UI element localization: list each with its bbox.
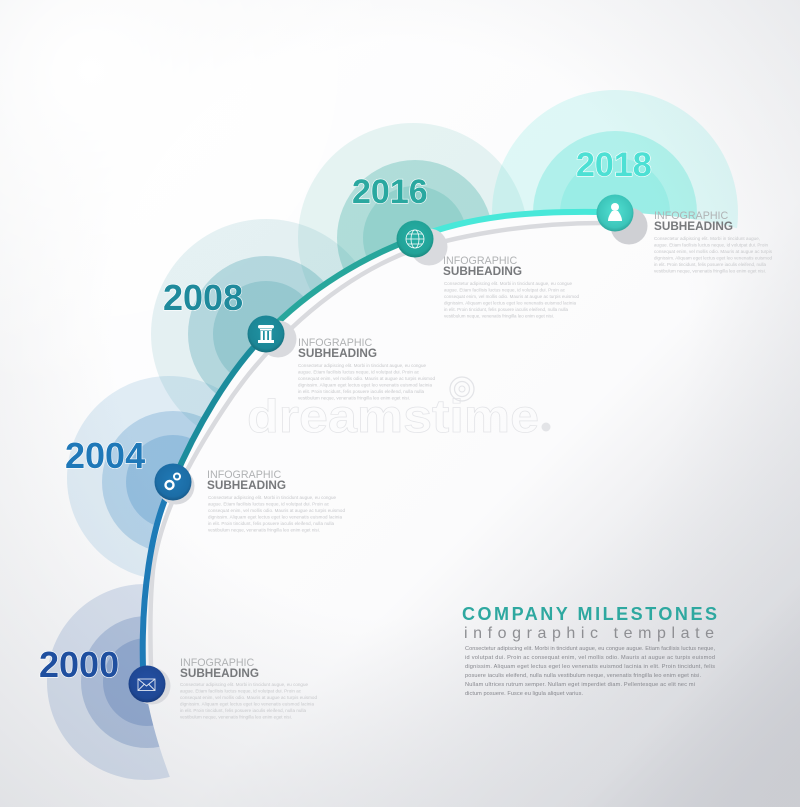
text block 2018: vestibulum neque, venenatis fringilla leo enim eget nisi. <box>654 268 766 274</box>
year 2018: 2018 <box>576 146 652 184</box>
text block 2000: augue. Etiam facilisis luctus neque, id volutpat dui. Proin ac <box>180 688 302 694</box>
text block 2008: vestibulum neque, venenatis fringilla leo enim eget nisi. <box>298 396 410 400</box>
text block 2000: consequat enim, vel mollis odio. Mauris at augue ac turpis euismod <box>180 695 317 700</box>
node 2004 <box>154 464 194 504</box>
segment 2008-2016 <box>266 238 415 334</box>
year 2008: 2008 <box>163 277 243 318</box>
year 2000: 2000 <box>39 644 119 685</box>
text block 2004: Consectetur adipiscing elit. Morbi in tincidunt augue, eu congue <box>208 495 336 500</box>
year labels <box>39 146 652 685</box>
text block 2016: Consectetur adipiscing elit. Morbi in tincidunt augue, eu congue <box>444 281 572 286</box>
text block 2004: in elit. Proin tincidunt, felis posuere iaculis eleifend, nulla nulla <box>208 521 334 526</box>
description: Nullam ultrices rutrum semper. Nullam eget imperdiet diam. Pellentesque ac elit nec mi <box>465 682 695 688</box>
node 2016 <box>396 220 448 266</box>
title: COMPANY MILESTONES <box>462 604 717 624</box>
node 2008 <box>248 316 296 358</box>
text block 2018 <box>654 210 773 274</box>
segment 2000-2004 <box>143 482 173 668</box>
text block 2004: INFOGRAPHIC <box>207 469 282 481</box>
text block 2000: vestibulum neque, venenatis fringilla leo enim eget nisi. <box>180 714 292 720</box>
description <box>465 646 715 697</box>
text block 2000: Consectetur adipiscing elit. Morbi in tincidunt augue, eu congue <box>180 682 308 687</box>
grey shadow curve <box>150 223 610 668</box>
subtitle: infographic template <box>464 625 714 642</box>
text block 2000: INFOGRAPHIC <box>180 657 255 669</box>
icon: column <box>258 325 274 343</box>
text block 2016: consequat enim, vel mollis odio. Mauris at augue ac turpis euismod <box>444 294 579 299</box>
watermark <box>247 377 550 442</box>
text block 2004: vestibulum neque, venenatis fringilla leo enim eget nisi. <box>208 528 320 532</box>
text block 2016: in elit. Proin tincidunt, felis posuere iaculis eleifend, nulla nulla <box>444 307 568 312</box>
icon: person <box>608 203 622 221</box>
watermark: dreamstime <box>247 390 539 442</box>
text block 2000 <box>180 657 317 720</box>
text block 2016: vestibulum neque, venenatis fringilla leo enim eget nisi. <box>444 314 554 318</box>
description: Consectetur adipiscing elit. Morbi in tincidunt augue, eu congue augue. Etiam facilisis luctus neque, <box>465 646 715 652</box>
segment 2016-2018 <box>415 212 600 238</box>
text block 2004: SUBHEADING <box>207 479 286 492</box>
text block 2016: SUBHEADING <box>443 265 522 278</box>
text block 2016: dignissim. Aliquam eget lectus eget leo venenatis euismod lacinia <box>444 300 576 306</box>
description: id volutpat dui. Proin ac consequat enim, vel mollis odio. Mauris at augue ac turpis euismod <box>465 655 715 661</box>
text block 2000: SUBHEADING <box>180 667 259 680</box>
text block 2016 <box>443 255 579 318</box>
text block 2004 <box>207 469 345 532</box>
text block 2018: INFOGRAPHIC <box>654 210 729 222</box>
text block 2004: consequat enim, vel mollis odio. Mauris at augue ac turpis euismod <box>208 508 345 513</box>
text block 2008: consequat enim, vel mollis odio. Mauris at augue ac turpis euismod <box>298 376 435 381</box>
text block 2016: augue. Etiam facilisis luctus neque, id volutpat dui. Proin ac <box>444 288 566 292</box>
text block 2018: SUBHEADING <box>654 220 733 233</box>
description: dictum posuere. Fusce eu ligula aliquet varius. <box>465 691 583 697</box>
text block 2008 <box>298 337 435 400</box>
circles: 2018 <box>492 90 738 228</box>
text block 2008: Consectetur adipiscing elit. Morbi in tincidunt augue, eu congue <box>298 363 426 368</box>
year 2004: 2004 <box>65 435 145 476</box>
icon: envelope <box>138 679 155 690</box>
text block 2008: INFOGRAPHIC <box>298 337 373 349</box>
text block 2000: dignissim. Aliquam eget lectus eget leo venenatis euismod lacinia <box>180 702 314 706</box>
text block 2008: SUBHEADING <box>298 347 377 360</box>
timeline curve <box>143 212 600 668</box>
icon: gears <box>166 474 180 489</box>
text block 2008: in elit. Proin tincidunt, felis posuere iaculis eleifend, nulla nulla <box>298 389 424 394</box>
node 2000 <box>128 666 170 704</box>
text block 2018: dignissim. Aliquam eget lectus eget leo venenatis euismod <box>654 256 772 260</box>
circles: 2000 <box>47 584 170 780</box>
text block 2008: dignissim. Aliquam eget lectus eget leo venenatis euismod lacinia <box>298 382 432 388</box>
circles: 2016 <box>298 123 524 290</box>
icon: globe <box>406 230 424 248</box>
text block 2018: Consectetur adipiscing elit. Morbi in tincidunt augue, <box>654 236 760 241</box>
text block 2004: augue. Etiam facilisis luctus neque, id volutpat dui. Proin ac <box>208 502 330 506</box>
text block 2000: in elit. Proin tincidunt, felis posuere iaculis eleifend, nulla nulla <box>180 708 306 713</box>
description: posuere iaculis eleifend, nulla nulla vestibulum neque, venenatis fringilla leo enim eget nisi. <box>465 673 701 679</box>
segment 2004-2008 <box>173 334 266 482</box>
text block 2016: INFOGRAPHIC <box>443 255 518 267</box>
text block 2018: augue. Etiam facilisis luctus neque, id volutpat dui. Proin <box>654 242 768 248</box>
circles: 2004 <box>67 376 218 577</box>
node 2018 <box>596 194 648 244</box>
year 2016: 2016 <box>352 173 428 211</box>
concentric circles <box>47 90 738 780</box>
description: dignissim. Aliquam eget lectus eget leo venenatis euismod lacinia in elit. Proin tincidunt, felis <box>465 664 715 670</box>
text block 2008: augue. Etiam facilisis luctus neque, id volutpat dui. Proin ac <box>298 370 420 374</box>
text block 2018: in elit. Proin tincidunt, felis posuere iaculis eleifend, nulla <box>654 262 766 267</box>
text block 2018: consequat enim, vel mollis odio. Mauris at augue ac turpis <box>654 249 773 254</box>
circles: 2008 <box>151 219 356 426</box>
text block 2004: dignissim. Aliquam eget lectus eget leo venenatis euismod lacinia <box>208 514 342 520</box>
